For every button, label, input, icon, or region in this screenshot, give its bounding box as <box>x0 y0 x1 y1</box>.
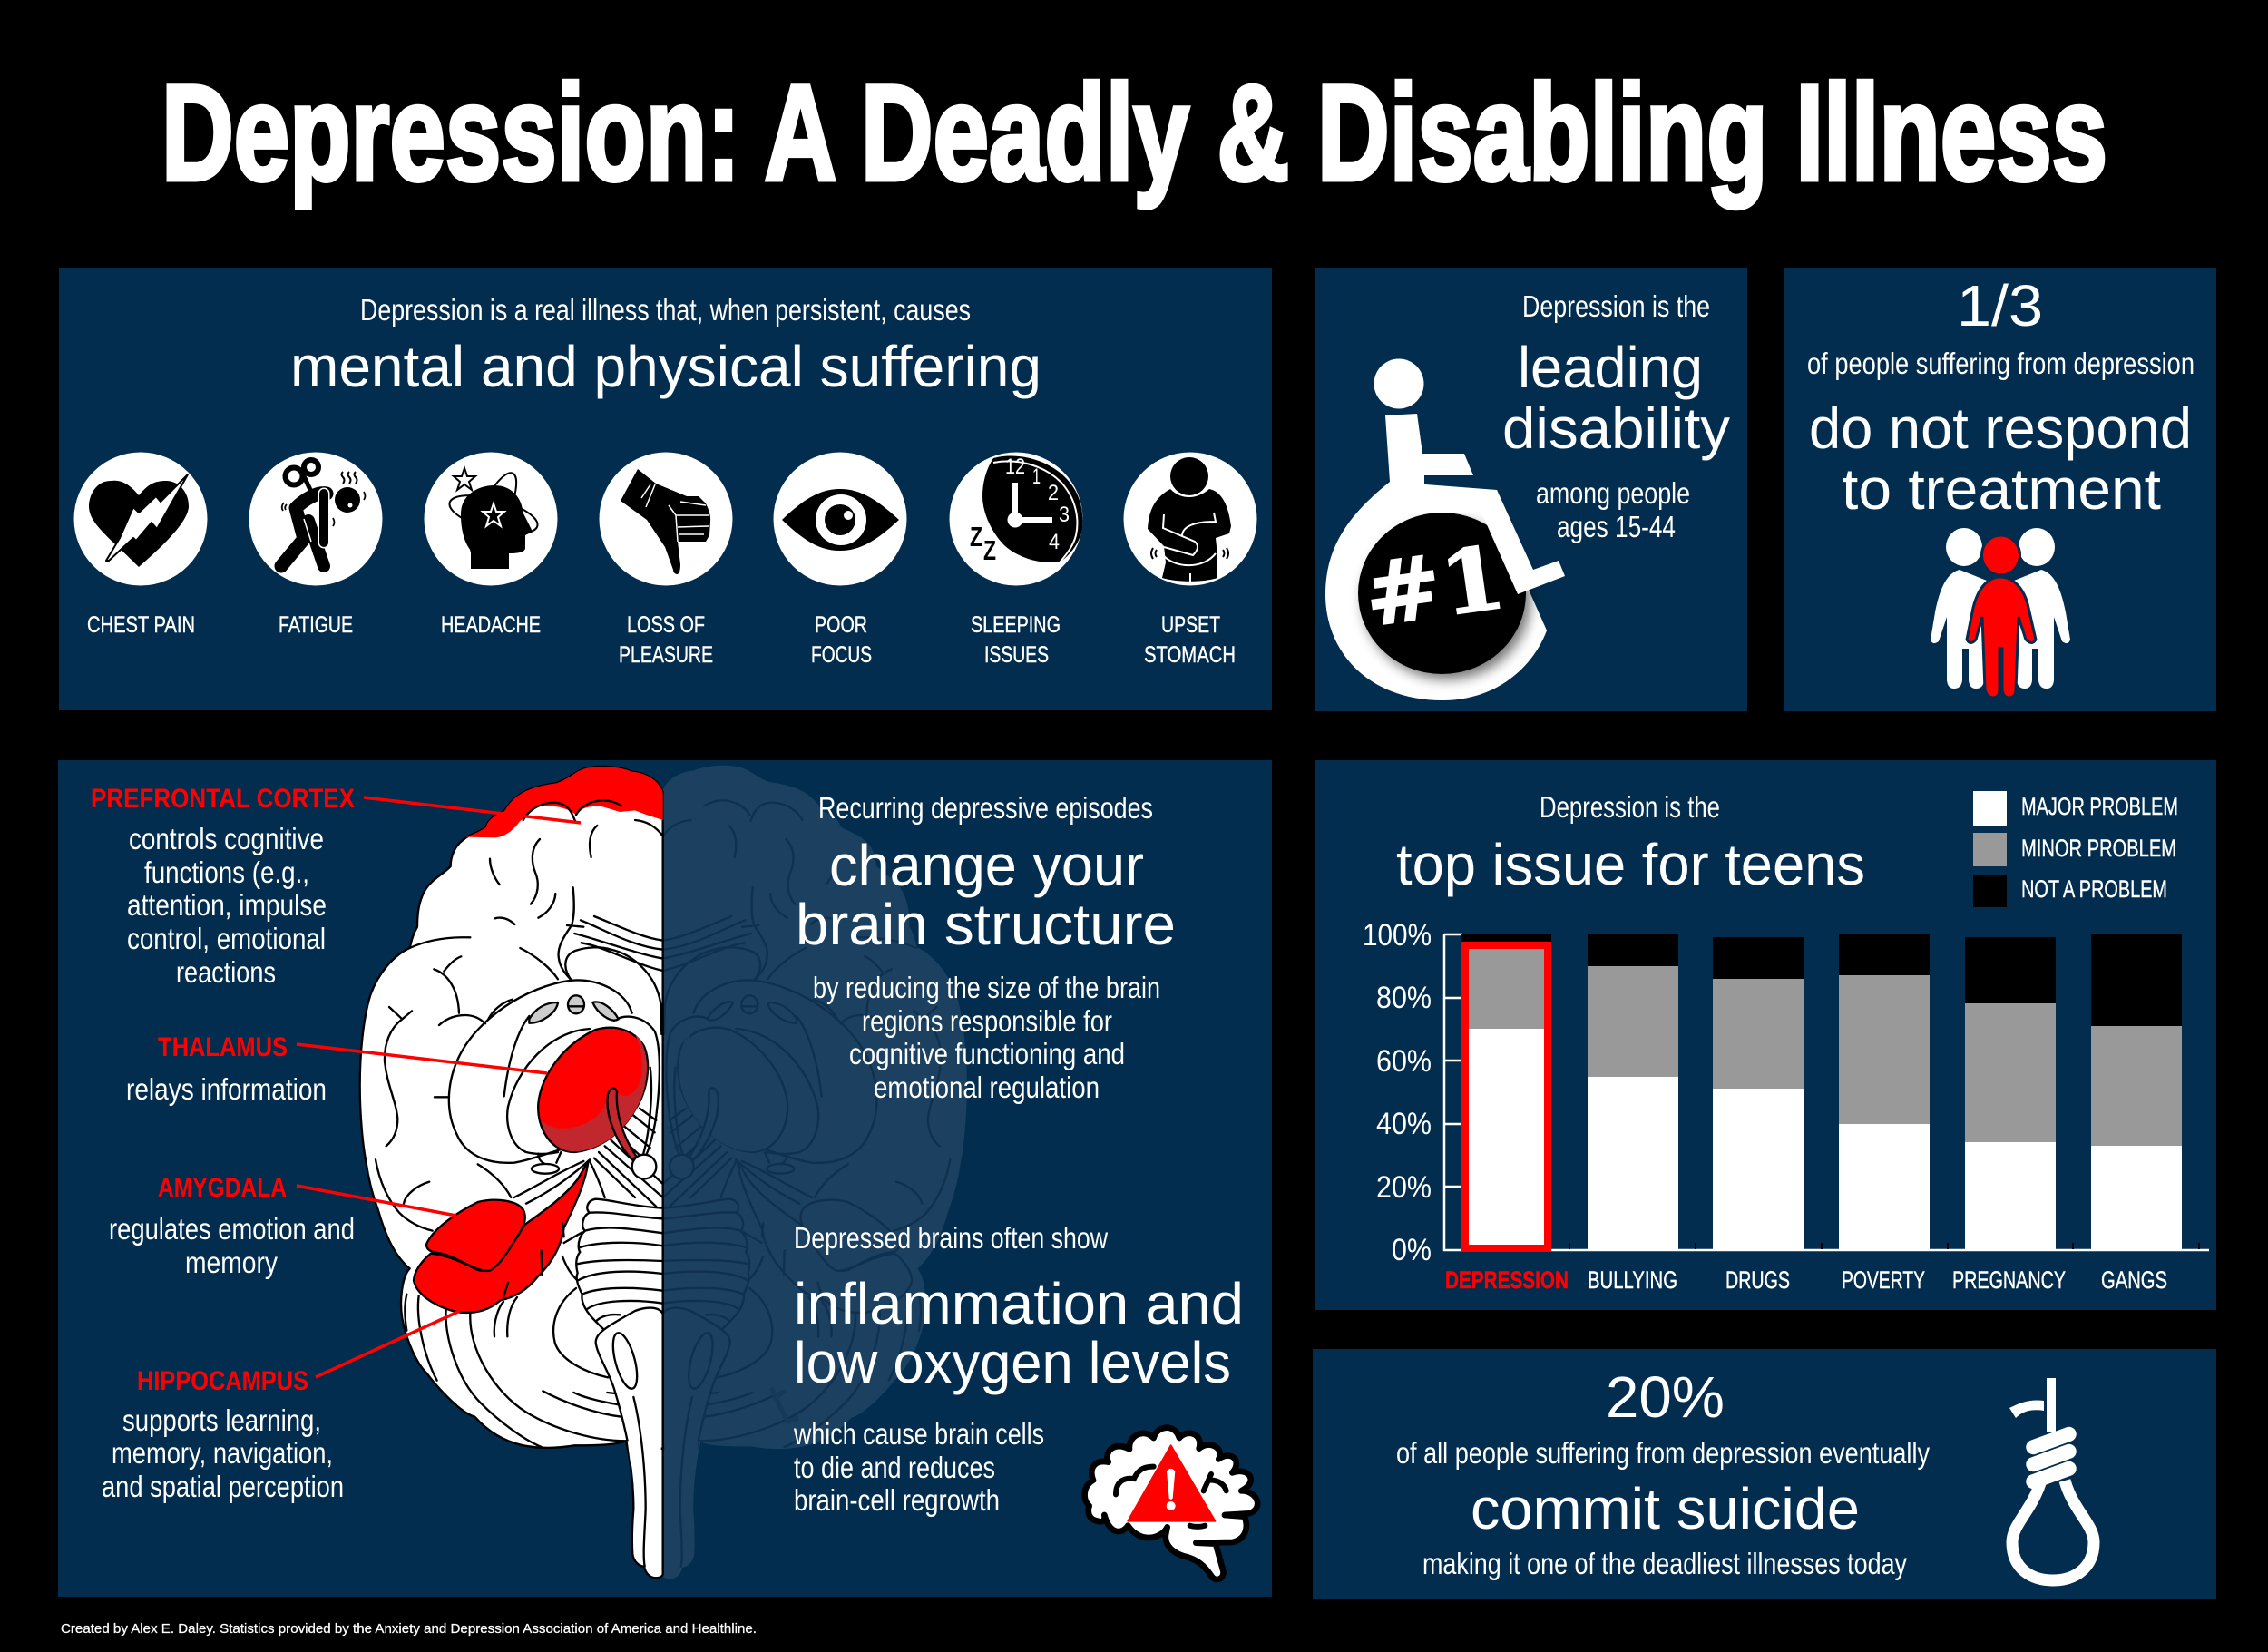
bar: pregnancy <box>1965 937 2056 1250</box>
icon: wheelchair with #1 <box>1325 359 1565 700</box>
heading: leading disability: leading <box>1518 335 1703 400</box>
text: among people ages 15-44 <box>1536 476 1690 543</box>
label: thalamus: relays information <box>126 1072 327 1106</box>
icon: sleeping issues <box>949 452 1083 586</box>
heading: do not respond to treatment: do not respond <box>1809 396 2192 461</box>
bar: depression <box>1461 934 1551 1250</box>
y axis labels: 0% <box>1392 1233 1432 1267</box>
labels: symptoms: HEADACHE <box>441 612 541 638</box>
icon: headache <box>425 452 557 586</box>
legend <box>1973 791 2178 907</box>
labels: symptoms: POOR <box>815 612 867 638</box>
text: inflammation and low oxygen levels: low oxygen levels <box>794 1330 1231 1395</box>
panel: do not respond to treatment <box>1784 268 2216 711</box>
label: prefrontal cortex: controls cognitive <box>129 822 324 855</box>
heading: top issue for teens: top issue for teens <box>1396 832 1865 897</box>
illustration: faded right half of brain <box>663 767 966 1578</box>
text: change your brain structure: emotional regulation <box>874 1070 1100 1104</box>
label: prefrontal cortex <box>91 784 581 989</box>
bar: bullying <box>1588 934 1678 1250</box>
x axis labels: BULLYING <box>1588 1266 1677 1294</box>
text: depression is the: Depression is the <box>1522 289 1710 323</box>
text: change your brain structure: Recurring depressive episodes <box>818 791 1153 825</box>
x axis labels: POVERTY <box>1842 1266 1925 1294</box>
label: thalamus <box>126 1032 547 1106</box>
text: making it one of the deadliest: making it one of the deadliest illnesses today <box>1422 1547 1907 1580</box>
bar: gangs <box>2091 934 2182 1250</box>
stat: 1/3: 1/3 <box>1957 273 2043 338</box>
labels: symptoms: LOSS OF <box>627 612 705 638</box>
icon: sleeping issues: 1 <box>1032 464 1041 489</box>
bar: drugs <box>1713 937 1804 1250</box>
icon: sleeping issues: Z <box>983 534 996 566</box>
y axis labels: 80% <box>1376 981 1432 1015</box>
label: amygdala: memory <box>185 1246 278 1279</box>
icon: sleeping issues: 12 <box>1005 455 1025 479</box>
y axis labels: 20% <box>1376 1170 1432 1205</box>
stacked bar chart <box>1363 918 2209 1294</box>
text: inflammation and low oxygen levels: brain-cell regrowth <box>794 1483 1000 1517</box>
text: intro line: Depression is a real illness that, when persistent, causes <box>360 293 971 327</box>
labels: symptoms: CHEST PAIN <box>87 612 195 638</box>
text: inflammation and low oxygen levels <box>793 1221 1244 1517</box>
heading: do not respond to treatment <box>1809 396 2192 522</box>
text: change your brain structure: change your <box>829 833 1144 898</box>
text: change your brain structure: brain structure <box>796 892 1176 957</box>
legend: MINOR PROBLEM <box>2021 835 2176 862</box>
panel: commit suicide <box>1313 1349 2216 1599</box>
label: hippocampus: and spatial perception <box>102 1470 344 1503</box>
icon: chest pain <box>74 452 207 586</box>
heading: do not respond to treatment: to treatment <box>1842 456 2161 522</box>
bar: poverty <box>1839 934 1930 1250</box>
text: among people ages 15-44: among people <box>1536 476 1690 510</box>
icon: sleeping issues: Z <box>970 521 982 552</box>
text: inflammation and low oxygen levels: Depressed brains often show <box>794 1221 1108 1255</box>
labels: symptoms: ISSUES <box>984 642 1049 668</box>
label: amygdala <box>109 1173 456 1279</box>
x axis labels: PREGNANCY <box>1952 1266 2066 1294</box>
icon: fatigue <box>249 452 383 586</box>
x axis labels <box>1445 1266 2167 1294</box>
label: hippocampus: HIPPOCAMPUS <box>137 1366 308 1396</box>
text: change your brain structure: by reducing the size of the brain <box>813 971 1160 1004</box>
label: hippocampus: supports learning, <box>122 1403 321 1437</box>
heading: leading disability: disability <box>1502 396 1730 461</box>
labels: symptoms: FOCUS <box>811 642 872 668</box>
stat: 20%: 20% <box>1606 1364 1725 1430</box>
text: change your brain structure <box>796 791 1176 1104</box>
label: hippocampus: memory, navigation, <box>112 1436 333 1470</box>
heading: mental and physical suffering: mental and physical suffering <box>290 334 1041 399</box>
label: amygdala: AMYGDALA <box>158 1173 287 1203</box>
label: amygdala: regulates emotion and <box>109 1212 355 1246</box>
icon: three people with one in red <box>1931 528 2070 698</box>
y axis labels: 100% <box>1363 918 1432 953</box>
labels: symptoms: STOMACH <box>1144 642 1236 668</box>
label: prefrontal cortex: PREFRONTAL CORTEX <box>91 784 355 814</box>
illustration: left half of brain with red regions <box>360 767 663 1578</box>
footer credit: Created by Alex E. Daley. Statistics provided by the Anxiety and Depression Association of America and Healthline. <box>61 1621 757 1637</box>
labels: symptoms: UPSET <box>1161 612 1220 638</box>
labels: symptoms <box>87 612 1236 668</box>
icon: wheelchair with #1: #1 <box>1358 526 1511 647</box>
label: prefrontal cortex: attention, impulse <box>127 888 327 922</box>
text: inflammation and low oxygen levels: which cause brain cells <box>793 1417 1044 1451</box>
icon: sleeping issues: 4 <box>1049 530 1060 554</box>
labels: symptoms: SLEEPING <box>971 612 1061 638</box>
panel: brain <box>58 760 1272 1597</box>
icon: noose <box>2009 1378 2094 1580</box>
illustration: ghost brain mark <box>771 1388 798 1422</box>
y axis labels: 60% <box>1376 1044 1432 1079</box>
panel: top issue for teens <box>1315 760 2216 1310</box>
labels: symptoms: FATIGUE <box>279 612 353 638</box>
y axis labels: 40% <box>1376 1107 1432 1141</box>
heading: commit suicide: commit suicide <box>1471 1476 1860 1541</box>
legend: NOT A PROBLEM <box>2021 875 2167 903</box>
icon: upset stomach <box>1123 452 1257 586</box>
text: change your brain structure: regions responsible for <box>862 1004 1112 1038</box>
text: of people suffering from depression: of people suffering from depression <box>1807 347 2195 380</box>
icon: brain with warning triangle <box>1085 1428 1257 1579</box>
text: change your brain structure: cognitive functioning and <box>849 1037 1125 1070</box>
text: inflammation and low oxygen levels: inflammation and <box>794 1271 1244 1336</box>
label: hippocampus <box>102 1311 460 1503</box>
icon: sleeping issues: 2 <box>1048 481 1059 505</box>
label: prefrontal cortex: reactions <box>176 955 276 989</box>
heading: leading disability <box>1502 335 1730 461</box>
panel: mental and physical suffering <box>59 268 1272 710</box>
icon: loss of pleasure <box>599 452 733 586</box>
text: depression is the: Depression is the <box>1540 790 1720 824</box>
x axis labels: DRUGS <box>1725 1266 1790 1294</box>
text: of all people suffering: of all people suffering from depression eventually <box>1396 1436 1930 1470</box>
text: among people ages 15-44: ages 15-44 <box>1557 510 1676 543</box>
icon: poor focus <box>773 452 907 586</box>
x axis labels: DEPRESSION <box>1445 1266 1569 1294</box>
text: inflammation and low oxygen levels: to die and reduces <box>794 1451 995 1484</box>
y axis labels <box>1363 918 1432 1267</box>
labels: symptoms: PLEASURE <box>619 642 713 668</box>
label: prefrontal cortex: control, emotional <box>127 922 326 955</box>
x axis labels: GANGS <box>2101 1266 2167 1294</box>
icon: sleeping issues: 3 <box>1059 503 1070 527</box>
label: thalamus: THALAMUS <box>158 1032 288 1062</box>
legend: MAJOR PROBLEM <box>2021 793 2178 820</box>
label: prefrontal cortex: functions (e.g., <box>144 855 309 889</box>
panel: leading disability <box>1315 268 1747 711</box>
